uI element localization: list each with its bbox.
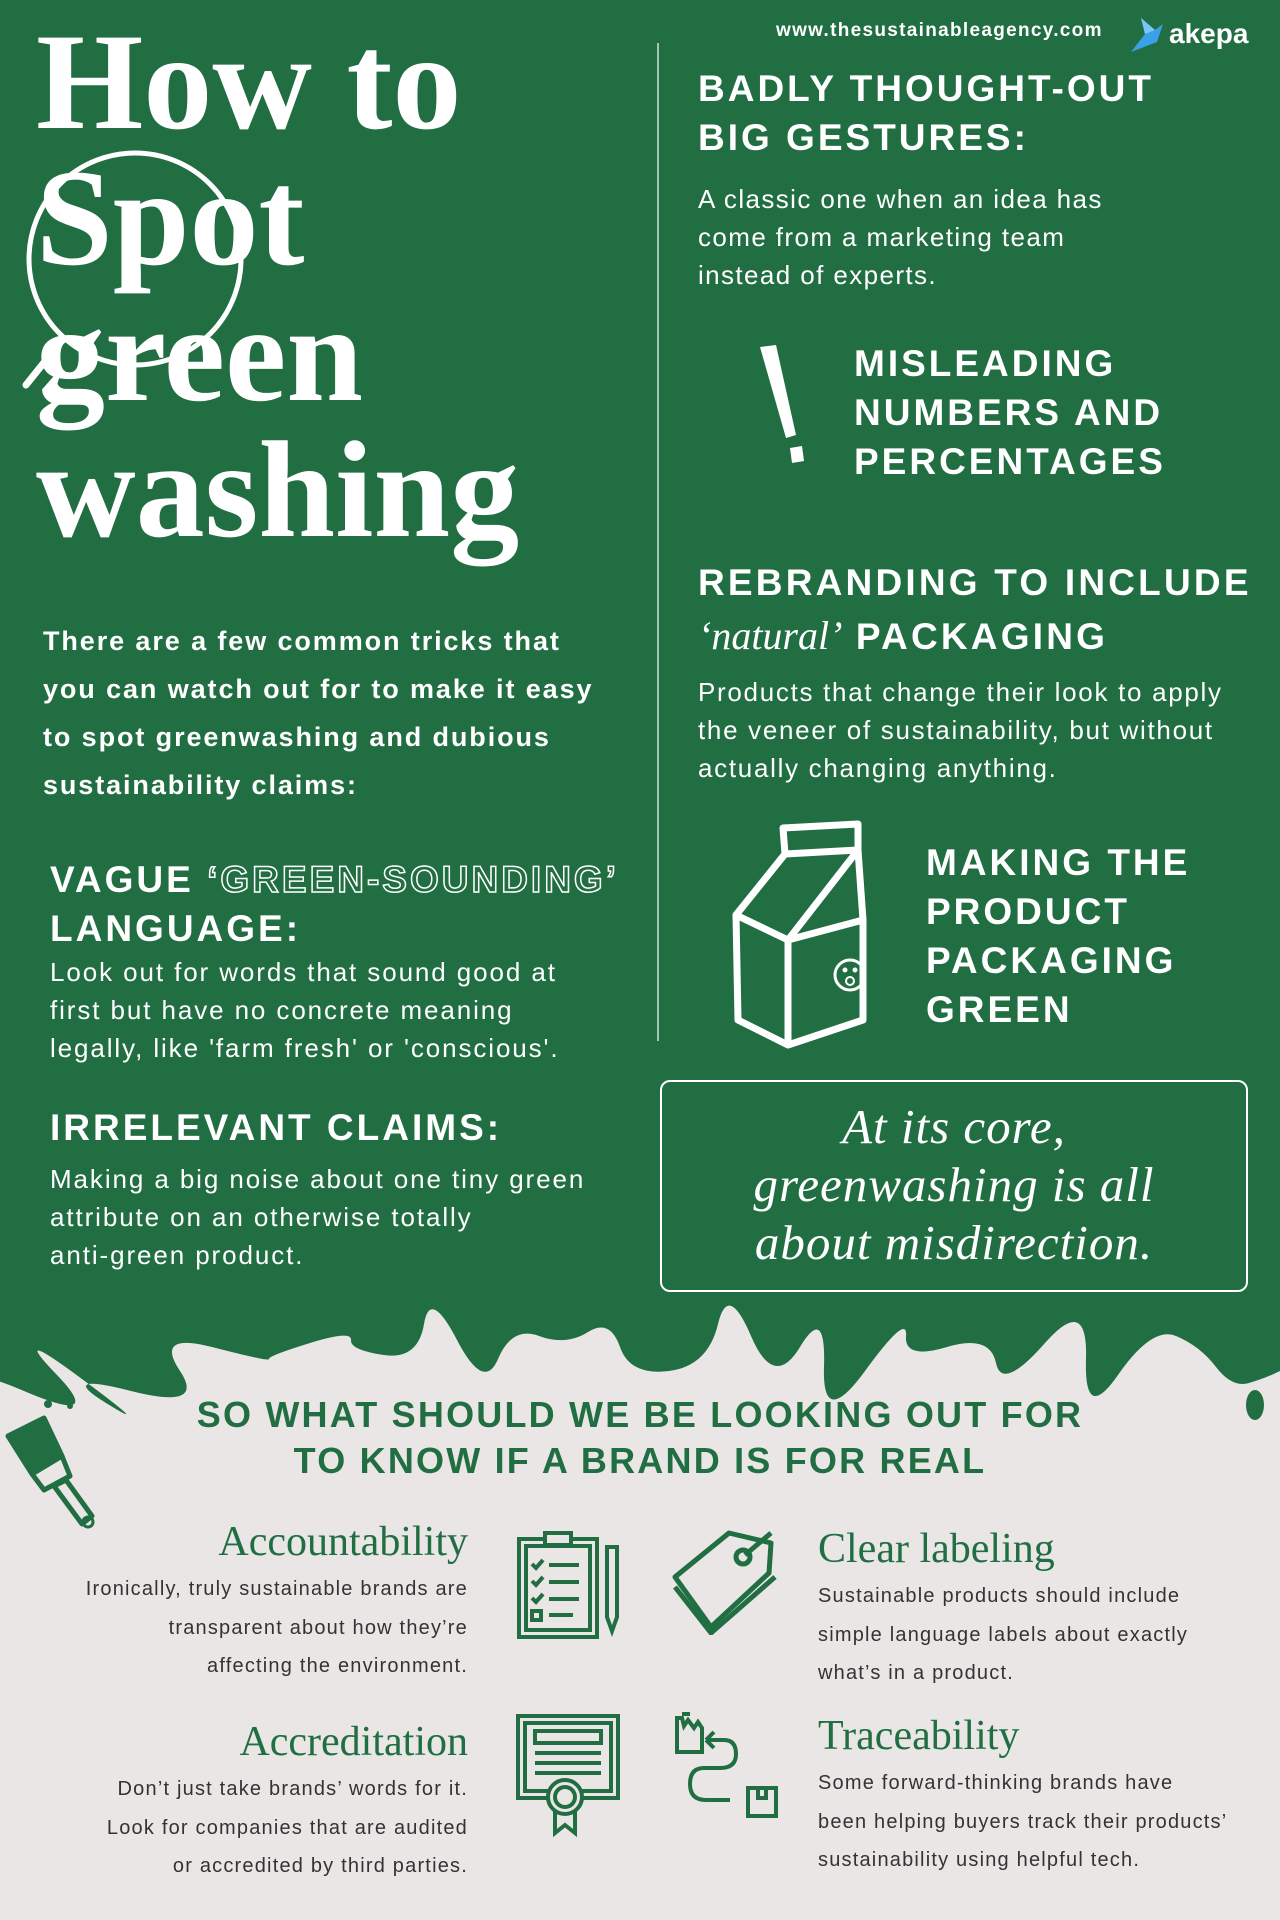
panel: traceability: been helping buyers track their products’ <box>818 1810 1227 1832</box>
callout: quote box <box>660 1080 1248 1292</box>
panel: accountability: transparent about how they’re <box>169 1616 468 1638</box>
bottom heading: TO KNOW IF A BRAND IS FOR REAL <box>294 1440 986 1481</box>
panel: big gestures: A classic one when an idea has <box>698 184 1103 214</box>
panel: big gestures: BIG GESTURES: <box>698 117 1029 158</box>
panel: irrelevant claims: anti-green product. <box>50 1240 304 1270</box>
logo: akepa <box>1131 18 1249 52</box>
panel: misleading numbers: NUMBERS AND <box>854 392 1163 433</box>
icon: paint brush <box>6 1400 94 1528</box>
panel: making packaging green: MAKING THE <box>926 842 1190 883</box>
callout: quote box: about misdirection. <box>755 1215 1153 1270</box>
panel: rebranding <box>698 562 1252 783</box>
panel: traceability: Some forward-thinking brands have <box>818 1772 1173 1794</box>
icon: clipboard <box>517 1531 619 1639</box>
panel: clear labeling: what’s in a product. <box>818 1662 1014 1684</box>
icon: magnifier <box>22 150 244 388</box>
panel: big gestures: BADLY THOUGHT-OUT <box>698 68 1154 109</box>
panel: accreditation: or accredited by third parties. <box>173 1855 468 1877</box>
panel: traceability: sustainability using helpful tech. <box>818 1849 1140 1871</box>
panel: traceability: Traceability <box>818 1713 1019 1759</box>
icon: tag <box>672 1530 777 1635</box>
panel: rebranding: the veneer of sustainability, but without <box>698 715 1214 745</box>
bottom heading <box>197 1394 1083 1481</box>
panel: vague language: VAGUE ‘GREEN-SOUNDING’ <box>50 859 619 900</box>
callout: quote box: greenwashing is all <box>753 1157 1155 1212</box>
panel: vague language: Look out for words that sound good at <box>50 957 557 987</box>
panel: accreditation: Accreditation <box>239 1719 468 1765</box>
panel: rebranding: Products that change their look to apply <box>698 677 1223 707</box>
panel: accountability <box>86 1519 468 1677</box>
intro text: you can watch out for to make it easy <box>43 674 593 704</box>
panel: irrelevant claims: IRRELEVANT CLAIMS: <box>50 1107 502 1148</box>
bottom heading: SO WHAT SHOULD WE BE LOOKING OUT FOR <box>197 1394 1083 1435</box>
header url: www.thesustainableagency.com <box>776 20 1103 41</box>
panel: making packaging green: PRODUCT <box>926 891 1130 932</box>
logo: akepa: akepa <box>1169 18 1248 49</box>
icon: exclamation <box>760 345 804 463</box>
panel: making packaging green: GREEN <box>926 989 1073 1030</box>
panel: vague language <box>50 859 619 1063</box>
panel: clear labeling: Clear labeling <box>818 1526 1055 1572</box>
panel: clear labeling: Sustainable products should include <box>818 1585 1180 1607</box>
panel: vague language: first but have no concrete meaning <box>50 995 514 1025</box>
title: How to <box>36 5 461 158</box>
intro text: to spot greenwashing and dubious <box>43 722 551 752</box>
panel: accountability: Ironically, truly sustainable brands are <box>86 1578 468 1600</box>
panel: making packaging green: PACKAGING <box>926 940 1176 981</box>
intro text <box>43 626 593 800</box>
panel: rebranding: ‘natural’ PACKAGING <box>698 613 1108 658</box>
panel: irrelevant claims: attribute on an otherwise totally <box>50 1202 473 1232</box>
panel: accountability: Accountability <box>218 1519 468 1565</box>
panel: accreditation: Don’t just take brands’ words for it. <box>118 1778 468 1800</box>
panel: big gestures <box>698 68 1154 290</box>
title <box>22 5 519 566</box>
panel: vague language: legally, like 'farm fresh' or 'conscious'. <box>50 1033 560 1063</box>
panel: misleading numbers: PERCENTAGES <box>854 441 1166 482</box>
title: green <box>36 277 363 430</box>
panel: misleading numbers: MISLEADING <box>854 343 1116 384</box>
panel: rebranding: REBRANDING TO INCLUDE <box>698 562 1252 603</box>
panel: accreditation <box>107 1719 468 1877</box>
panel: accreditation: Look for companies that are audited <box>107 1816 468 1838</box>
callout: quote box: At its core, <box>842 1099 1066 1154</box>
panel: accountability: affecting the environment. <box>207 1655 468 1677</box>
panel: big gestures: come from a marketing team <box>698 222 1065 252</box>
intro text: There are a few common tricks that <box>43 626 561 656</box>
title: Spot <box>36 141 304 294</box>
icon: certificate <box>516 1714 620 1837</box>
panel: clear labeling <box>818 1526 1188 1684</box>
icon: traceability <box>675 1712 778 1818</box>
title: washing <box>36 413 519 566</box>
panel: irrelevant claims: Making a big noise about one tiny green <box>50 1164 585 1194</box>
panel: clear labeling: simple language labels about exactly <box>818 1624 1188 1646</box>
panel: rebranding: actually changing anything. <box>698 753 1058 783</box>
panel: traceability <box>818 1713 1227 1871</box>
panel: misleading numbers <box>854 343 1166 482</box>
panel: big gestures: instead of experts. <box>698 260 937 290</box>
panel: vague language: LANGUAGE: <box>50 908 301 949</box>
icon: milk carton <box>732 820 866 1048</box>
intro text: sustainability claims: <box>43 770 358 800</box>
panel: making packaging green <box>926 842 1190 1030</box>
panel: irrelevant claims <box>50 1107 585 1270</box>
